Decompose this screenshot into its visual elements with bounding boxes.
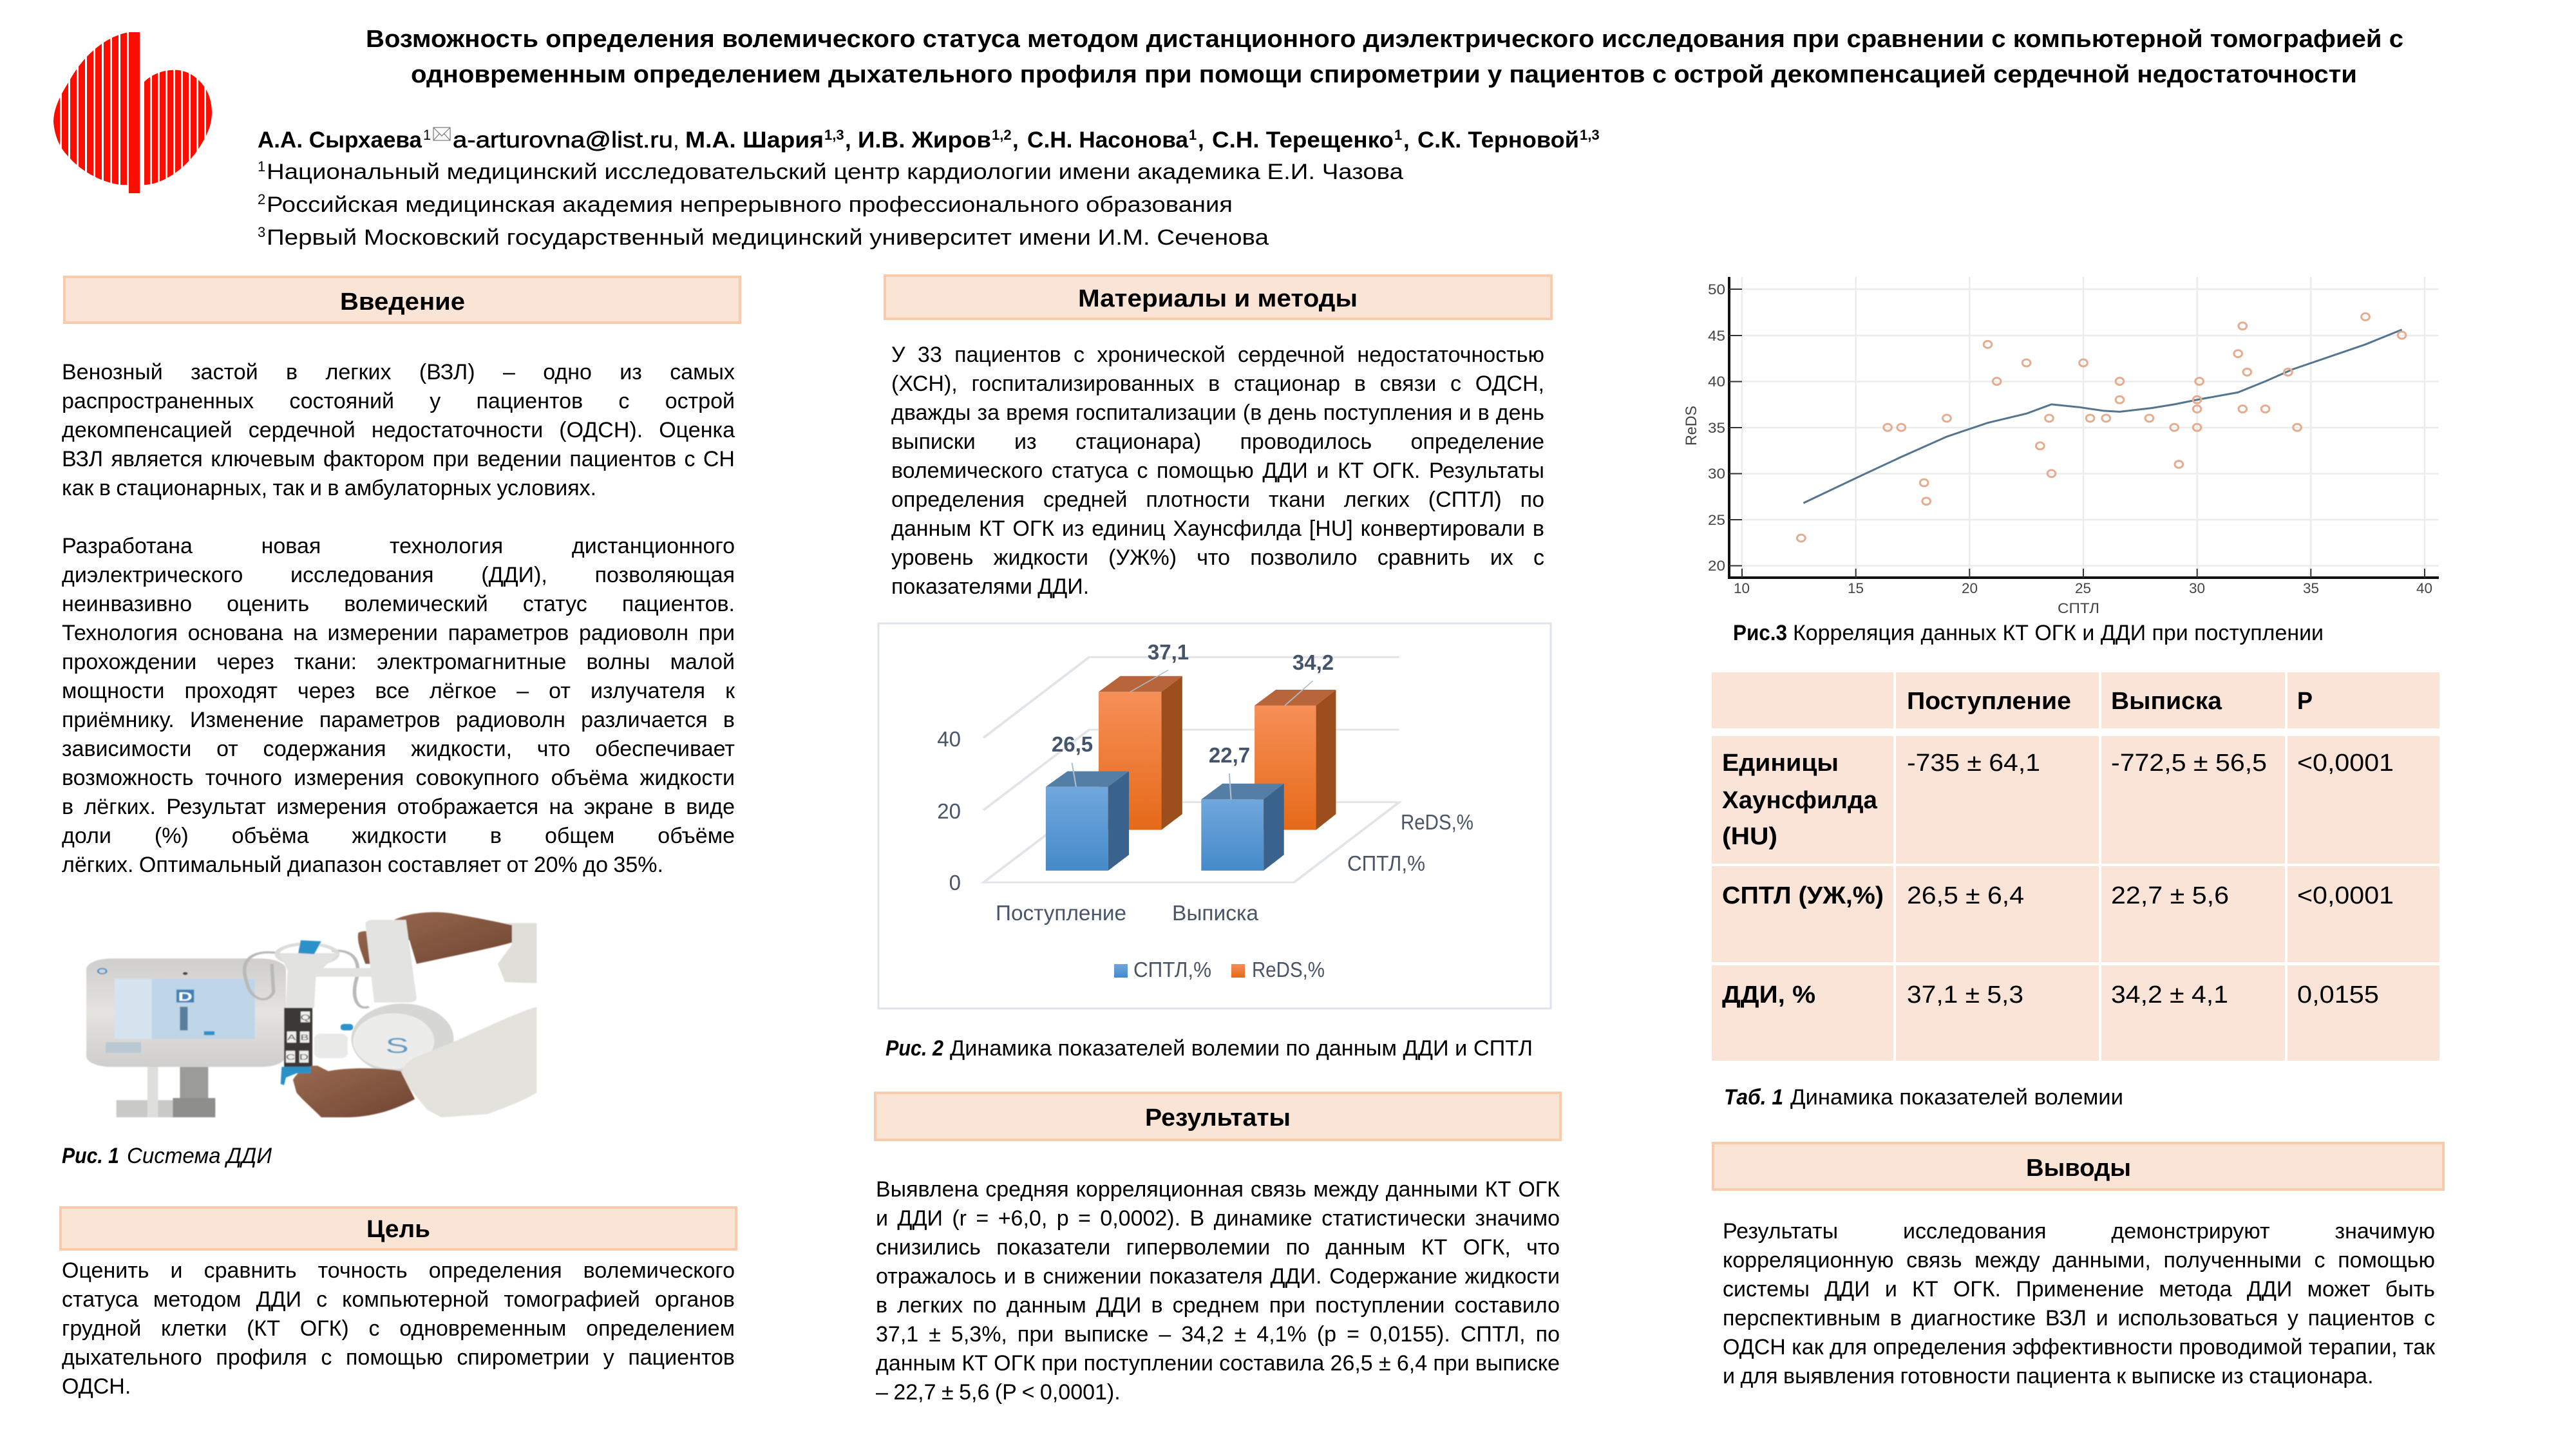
panel heading: Материалы и методы: Материалы и методы	[1078, 285, 1358, 312]
table 1: 22,7 ± 5,6	[2111, 882, 2229, 909]
text: Введение: зависимости от содержания жидкости, что обеспечивает	[62, 737, 735, 761]
authors: С.К. Терновой	[1417, 128, 1579, 153]
axis labels: 30	[2189, 580, 2205, 596]
caption: Рис. 1: Система ДДИ	[127, 1144, 272, 1168]
text: Материалы и методы: определения средней плотности ткани легких (СПТЛ) по	[891, 488, 1544, 512]
text: Результаты: снизились показатели гиперволемии по данным КТ ОГК, что	[876, 1235, 1560, 1260]
panel heading: Цель	[61, 1208, 736, 1249]
text: Выводы	[1723, 1219, 2436, 1388]
authors: ,	[673, 128, 679, 153]
text: Результаты: Выявлена средняя корреляционная связь между данными КТ ОГК	[876, 1177, 1560, 1202]
table 1	[1712, 672, 2439, 1061]
blue bracket	[281, 1067, 310, 1085]
affiliations: 1	[258, 158, 265, 175]
sleeve upper	[498, 923, 536, 983]
blue tag	[298, 940, 321, 954]
title: одновременным определением дыхательного профиля при помощи спирометрии у пациентов с острой декомпенсацией сердечной недостаточности	[411, 61, 2357, 88]
chart grid and bars	[983, 657, 1399, 882]
authors: 1,3	[824, 127, 844, 143]
text: Введение: Разработана новая технология дистанционного	[62, 534, 735, 558]
hand upper	[358, 912, 512, 964]
caption: Таб. 1: Динамика показателей волемии	[1790, 1085, 2123, 1110]
small connector	[314, 1024, 353, 1058]
table 1: ДДИ, %	[1722, 981, 1815, 1009]
table 1: 26,5 ± 6,4	[1907, 882, 2024, 909]
table 1: <0,0001	[2297, 750, 2394, 777]
table 1: Р	[2297, 688, 2313, 715]
text: Выводы: перспективным в диагностике ВЗЛ и использоваться у пациентов с	[1723, 1306, 2435, 1331]
authors: 1	[1189, 127, 1197, 143]
text: Материалы и методы: показателями ДДИ.	[891, 574, 1089, 599]
figure 3: scatter plot	[1683, 277, 2439, 616]
text: Введение: доли (%) объёма жидкости в общем объёме	[62, 824, 735, 848]
text: Цель: Оценить и сравнить точность определения волемического	[62, 1258, 735, 1283]
axis labels: 40	[1708, 374, 1725, 390]
axis labels: 10	[1734, 580, 1750, 596]
table 1: -772,5 ± 56,5	[2111, 750, 2267, 777]
panel heading: Выводы: Выводы	[2026, 1155, 2131, 1182]
text: Цель: грудной клетки (КТ ОГК) с одновременным определением	[62, 1316, 735, 1341]
text: Материалы и методы: волемического статуса с помощью ДДИ и КТ ОГК. Результаты	[891, 459, 1544, 483]
data labels	[1052, 640, 1334, 767]
axis labels: 25	[2075, 580, 2091, 596]
text: Результаты: и ДДИ (r = +6,0, p = 0,0002). В динамике статистически значимо	[876, 1206, 1560, 1231]
authors: ,	[1012, 128, 1019, 153]
logo: striped red heart	[53, 32, 212, 193]
authors: 1,3	[1580, 127, 1600, 143]
affiliations: Российская медицинская академия непрерывного профессионального образования	[267, 193, 1233, 217]
text: Результаты: – 22,7 ± 5,6 (P < 0,0001).	[876, 1380, 1121, 1405]
caption: Рис. 1	[62, 1144, 272, 1168]
text: Введение: декомпенсацией сердечной недостаточности (ОДСН). Оценка	[62, 418, 735, 442]
text: Введение: Технология основана на измерении параметров радиоволн при	[62, 621, 735, 645]
ear cup: S	[385, 1034, 409, 1057]
axes	[1729, 277, 2439, 578]
data labels: 26,5	[1052, 732, 1093, 756]
panel heading: Результаты: Результаты	[1145, 1104, 1291, 1132]
title: Возможность определения волемического статуса методом дистанционного диэлектрического исследования при сравнении с компьютерной томографией с	[366, 26, 2403, 53]
connector panel: D	[299, 1053, 308, 1062]
panel heading: Цель: Цель	[366, 1216, 430, 1243]
data labels: 22,7	[1209, 743, 1250, 767]
affiliations	[258, 158, 1403, 250]
affiliations: Первый Московский государственный медицинский университет имени И.М. Сеченова	[267, 225, 1269, 250]
table 1: -735 ± 64,1	[1907, 750, 2040, 777]
text: Материалы и методы: выписки из стационара) проводилось определение	[891, 430, 1544, 454]
text: Введение: Венозный застой в легких (ВЗЛ) – одно из самых	[62, 360, 735, 384]
text: Выводы: корреляционную связь между данными, полученными с помощью	[1723, 1248, 2435, 1273]
text: Введение: возможность точного измерения совокупного объёма жидкости	[62, 766, 735, 790]
text: Результаты: отражалось и в снижении показателя ДДИ. Содержание жидкости	[876, 1264, 1560, 1289]
connector panel: Q	[300, 1014, 310, 1022]
text: Введение: в лёгких. Результат измерения отображается на экране в виде	[62, 795, 735, 819]
authors: С.Н. Терещенко	[1212, 128, 1394, 153]
figure 1: device photo illustration	[86, 912, 536, 1117]
table 1: 34,2 ± 4,1	[2111, 981, 2228, 1009]
text: Введение	[62, 360, 735, 877]
monitor: D	[178, 990, 193, 1003]
legend: СПТЛ,%	[1133, 958, 1211, 981]
axis labels	[1683, 281, 2432, 616]
affiliations: 3	[258, 224, 265, 240]
authors: И.В. Жиров	[858, 128, 991, 153]
text: Введение: мощности проходят через все лёгкое – от излучателя к	[62, 679, 735, 703]
authors: 1,2	[992, 127, 1012, 143]
axis labels: 35	[2303, 580, 2319, 596]
text: Введение: лёгких. Оптимальный диапазон составляет от 20% до 35%.	[62, 853, 663, 877]
axis labels: ReDS	[1683, 406, 1700, 446]
axis labels: 35	[1708, 420, 1725, 436]
text: Введение: распространенных состояний у пациентов с острой	[62, 389, 735, 413]
orange bar admission	[1099, 676, 1182, 830]
text: Цель: статуса методом ДДИ с компьютерной томографией органов	[62, 1287, 735, 1312]
axis labels: СПТЛ	[2058, 600, 2099, 616]
axis labels: Поступление	[996, 901, 1126, 925]
axis labels	[937, 727, 1473, 925]
authors: 1	[1394, 127, 1402, 143]
authors: А.А. Сырхаева	[258, 128, 422, 153]
affiliations: Национальный медицинский исследовательский центр кардиологии имени академика Е.И. Чазова	[267, 160, 1403, 184]
authors: 1	[423, 127, 431, 143]
text: Цель: дыхательного профиля с помощью спирометрии у пациентов	[62, 1345, 735, 1370]
text: Введение: как в стационарных, так и в амбулаторных условиях.	[62, 476, 596, 500]
caption: Рис. 3: Рис.3	[1733, 621, 1787, 645]
text: Материалы и методы	[891, 343, 1544, 599]
chart frame	[878, 623, 1551, 1009]
caption: Рис. 3: Корреляция данных КТ ОГК и ДДИ при поступлении	[1793, 621, 2324, 645]
authors: ,	[845, 128, 851, 153]
grid	[1742, 277, 2439, 578]
axis labels: 0	[949, 871, 961, 895]
table 1: (HU)	[1722, 823, 1777, 850]
panel heading: Введение: Введение	[340, 289, 465, 316]
text: Материалы и методы: (ХСН), госпитализированных в стационар в связи с ОДСН,	[891, 372, 1544, 396]
connector panel: B	[300, 1034, 309, 1042]
table 1: Единицы	[1722, 750, 1839, 777]
caption: Рис. 2: Рис. 2	[886, 1036, 943, 1061]
caption: Рис. 1: Рис. 1	[62, 1144, 119, 1168]
legend	[1114, 958, 1325, 981]
text: Цель	[62, 1258, 735, 1399]
figure 2: 3D bar chart	[937, 640, 1473, 981]
cables and frame	[245, 944, 369, 1007]
text: Введение: ВЗЛ является ключевым фактором при ведении пациентов с СН	[62, 447, 735, 471]
panel heading: Материалы и методы	[885, 276, 1551, 319]
axis labels: 50	[1708, 281, 1725, 298]
table 1: <0,0001	[2297, 882, 2394, 909]
text: Результаты: 37,1 ± 5,3%, при выписке – 34,2 ± 4,1% (p = 0,0155). СПТЛ, по	[876, 1322, 1560, 1347]
axis labels: 20	[1962, 580, 1978, 596]
blue bar discharge	[1201, 784, 1284, 871]
stand	[117, 1067, 215, 1117]
authors: С.Н. Насонова	[1027, 128, 1189, 153]
table 1: Хаунсфилда	[1722, 787, 1878, 814]
text: Материалы и методы: дважды за время госпитализации (в день поступления и в день	[891, 401, 1544, 425]
connector panel: C	[286, 1053, 295, 1062]
text: Введение: приёмнику. Изменение параметров радиоволн различается в	[62, 708, 735, 732]
axis labels: 30	[1708, 466, 1725, 482]
text: Выводы: и для выявления готовности пациента к выписке из стационара.	[1723, 1364, 2374, 1388]
axis labels: Выписка	[1172, 901, 1259, 925]
frame strap	[279, 953, 376, 1008]
panel heading: Выводы	[1713, 1143, 2443, 1189]
axis labels: 40	[2416, 580, 2432, 596]
axis labels: 45	[1708, 328, 1725, 344]
connector panel: A	[287, 1034, 296, 1042]
text: Введение: прохождении через ткани: электромагнитные волны малой	[62, 650, 735, 674]
axis labels: 25	[1708, 512, 1725, 528]
data labels: 34,2	[1293, 650, 1334, 674]
axis labels: СПТЛ,%	[1347, 851, 1425, 875]
axis labels: 20	[1708, 558, 1725, 574]
axis labels: 20	[937, 799, 961, 823]
authors: М.А. Шария	[685, 128, 824, 153]
orange bar discharge	[1255, 690, 1336, 830]
text: Выводы: системы ДДИ и КТ ОГК. Применение метода ДДИ может быть	[1723, 1277, 2435, 1302]
authors: ,	[1198, 128, 1204, 153]
caption: Рис. 2: Динамика показателей волемии по данным ДДИ и СПТЛ	[950, 1036, 1533, 1061]
title	[366, 26, 2403, 88]
table 1: СПТЛ (УЖ,%)	[1722, 882, 1884, 909]
monitor	[86, 958, 286, 1067]
authors: ,	[1403, 128, 1410, 153]
caption: Таб. 1: Таб. 1	[1724, 1085, 1783, 1110]
authors	[258, 127, 1600, 153]
text: Выводы: ОДСН как для определения эффективности проводимой терапии, так	[1723, 1335, 2435, 1359]
text: Результаты	[876, 1177, 1560, 1405]
panel heading: Введение	[64, 277, 740, 323]
text: Введение: диэлектрического исследования (ДДИ), позволяющая	[62, 563, 735, 587]
text: Результаты: данным КТ ОГК при поступлении составила 26,5 ± 6,4 при выписке	[876, 1351, 1560, 1376]
table 1: 37,1 ± 5,3	[1907, 981, 2023, 1009]
table 1: 0,0155	[2297, 981, 2379, 1009]
text: Материалы и методы: уровень жидкости (УЖ%) что позволило сравнить их с	[891, 545, 1544, 570]
axis labels: ReDS,%	[1401, 810, 1473, 834]
text: Результаты: в легких по данным ДДИ в среднем при поступлении составило	[876, 1293, 1560, 1318]
authors: a-arturovna@list.ru	[453, 128, 673, 153]
legend: ReDS,%	[1252, 958, 1325, 981]
text: Материалы и методы: данным КТ ОГК из единиц Хаунсфилда [HU] конвертировали в	[891, 516, 1544, 541]
axis labels: 40	[937, 727, 961, 751]
blue bar admission	[1046, 772, 1129, 871]
connector panel	[284, 1008, 312, 1067]
text: Выводы: Результаты исследования демонстрируют значимую	[1723, 1219, 2435, 1244]
hand lower	[293, 1066, 415, 1117]
text: Введение: неинвазивно оценить волемический статус пациентов.	[62, 592, 735, 616]
panel heading: Результаты	[875, 1093, 1560, 1140]
sleeve lower	[402, 1007, 536, 1117]
table 1: Поступление	[1907, 688, 2071, 715]
data labels: 37,1	[1148, 640, 1189, 664]
upper strap	[365, 920, 417, 1003]
table 1: Выписка	[2111, 688, 2222, 715]
ear cup	[351, 1003, 453, 1074]
text: Материалы и методы: У 33 пациентов с хронической сердечной недостаточностью	[891, 343, 1544, 367]
text: Цель: ОДСН.	[62, 1374, 131, 1399]
data points and fit line	[1797, 313, 2406, 542]
axis labels: 15	[1848, 580, 1864, 596]
affiliations: 2	[258, 191, 265, 207]
icon: envelope	[433, 128, 450, 140]
